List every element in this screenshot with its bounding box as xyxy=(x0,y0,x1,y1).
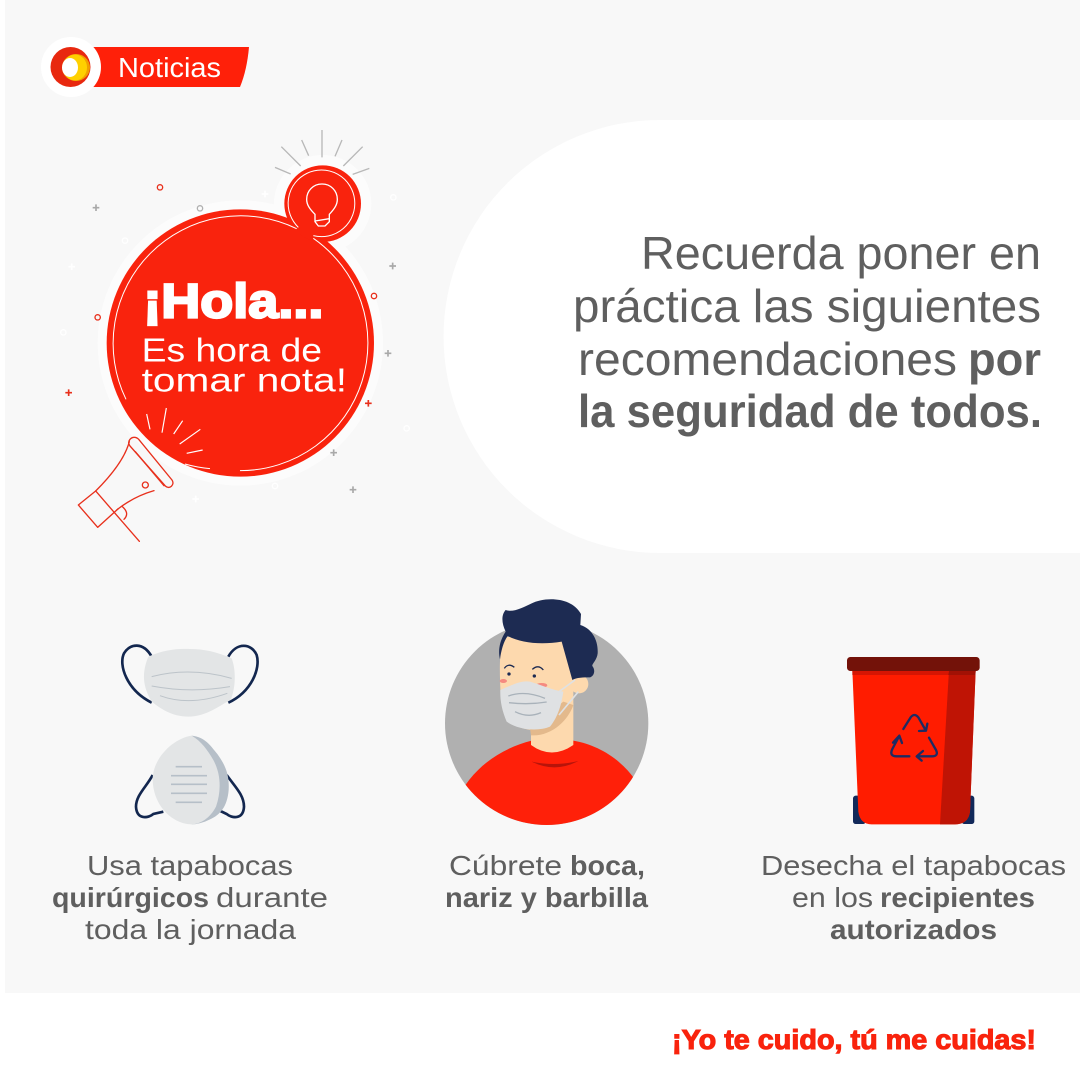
neck xyxy=(531,703,573,752)
subheading: Es hora de tomar nota: tomar nota! xyxy=(142,363,347,400)
caption: dispose in authorized bins: recipientes xyxy=(880,882,1035,913)
heading: recommendations message: por xyxy=(968,333,1041,385)
icon: person wearing mask xyxy=(445,599,648,830)
heading: recommendations message xyxy=(573,227,1042,437)
caption: cover mouth nose and chin: nariz y barbilla xyxy=(445,882,648,913)
icon: respirator mask xyxy=(136,736,244,824)
lid xyxy=(847,657,980,671)
caption: dispose in authorized bins: Desecha el tapabocas xyxy=(761,850,1066,881)
subheading: Es hora de tomar nota: Es hora de xyxy=(142,333,322,370)
grey circle xyxy=(445,622,648,825)
icon: megaphone xyxy=(78,437,173,541)
heading: recommendations message: recomendaciones xyxy=(578,333,957,385)
red label bar xyxy=(90,47,249,87)
icon: surgical mask xyxy=(122,646,258,717)
halo xyxy=(98,155,383,486)
jaw shadow xyxy=(530,702,573,735)
panel: white message pill xyxy=(444,120,1080,553)
burst lines xyxy=(147,408,203,453)
bin body xyxy=(852,670,976,824)
face xyxy=(500,637,573,730)
caption: cover mouth nose and chin xyxy=(445,850,648,913)
heading: recommendations message: la seguridad de todos. xyxy=(578,385,1042,437)
label text: Noticias xyxy=(118,52,221,83)
caption: dispose in authorized bins: en los xyxy=(792,882,873,913)
subheading: Es hora de tomar nota xyxy=(142,333,347,400)
caption: surgical masks: quirúrgicos xyxy=(52,882,209,913)
caption: surgical masks xyxy=(52,850,328,945)
icon: recycling symbol xyxy=(891,715,937,761)
red shirt xyxy=(466,740,633,825)
caption: surgical masks: durante xyxy=(216,882,328,913)
footer slogan: ¡Yo te cuido, tú me cuidas! xyxy=(672,1024,1036,1055)
rays above the bulb xyxy=(275,130,369,174)
big red circle xyxy=(107,209,374,477)
heading: recommendations message: Recuerda poner en xyxy=(641,227,1041,279)
icon: red recycling bin xyxy=(847,657,980,824)
caption: dispose in authorized bins: autorizados xyxy=(830,914,997,945)
icon: surgical mask and respirator xyxy=(122,646,258,824)
bin shade xyxy=(940,670,976,824)
heading: Hola: ¡Hola... xyxy=(143,274,323,328)
ear xyxy=(570,675,588,693)
mask xyxy=(500,680,578,729)
caption: surgical masks: Usa tapabocas xyxy=(87,850,293,881)
sparkles xyxy=(61,185,409,502)
caption: surgical masks: toda la jornada xyxy=(85,914,296,945)
thin white rings xyxy=(113,170,368,471)
hair xyxy=(499,599,598,680)
eyes and brows xyxy=(500,665,547,688)
caption: cover mouth nose and chin: Cúbrete xyxy=(449,850,562,881)
heading: recommendations message: práctica las siguientes xyxy=(573,280,1041,332)
badge: Noticias xyxy=(41,37,249,97)
illustration: Hola speech bubble with megaphone xyxy=(61,130,409,541)
icon: brand logo xyxy=(41,37,101,97)
small red circle xyxy=(284,165,361,242)
icon: light bulb xyxy=(307,184,337,226)
caption: cover mouth nose and chin: boca, xyxy=(570,850,645,881)
caption: dispose in authorized bins xyxy=(761,850,1066,945)
wheels xyxy=(853,796,866,824)
